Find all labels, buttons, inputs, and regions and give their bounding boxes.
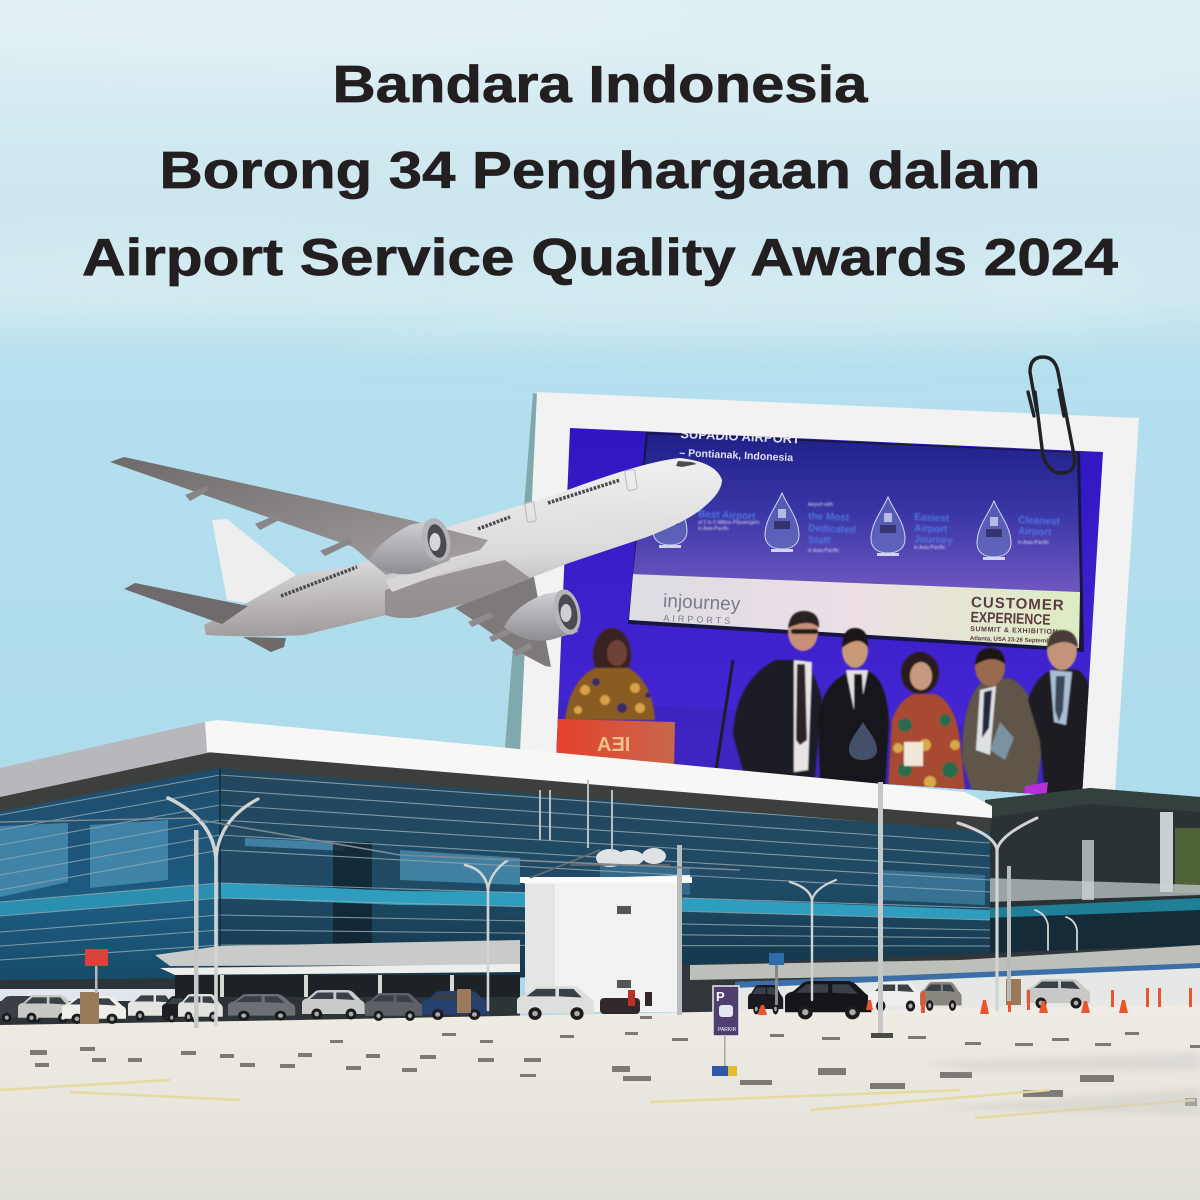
award captions on slide: in Asia-Pacific (698, 526, 730, 532)
cockpit window (676, 461, 697, 467)
belly fairing highlight (385, 555, 470, 592)
vertical fin (212, 519, 296, 603)
fuselage (204, 458, 722, 636)
white control tower building (520, 848, 692, 1012)
horizontal tailplane far (243, 637, 286, 652)
right wing teal band (985, 898, 1200, 918)
dark ground-floor backdrop (0, 975, 520, 1032)
teal band on glass (0, 883, 220, 916)
right wing lower glass (985, 897, 1200, 955)
yellow parking lines (0, 1080, 1195, 1118)
podium logo: AƎI (597, 734, 630, 756)
award trophies on slide (653, 489, 1011, 560)
satellite dishes (596, 848, 666, 867)
terminal left glass face (0, 760, 220, 992)
slide heading: SUPADIO AIRPORT (680, 426, 800, 446)
wing root shadow (385, 560, 530, 618)
paperclip (1028, 357, 1074, 473)
red no-entry sign (85, 949, 108, 993)
award captions on slide: of 2 to 5 Million Passengers (698, 520, 760, 526)
parked cars (0, 979, 1090, 1024)
roof white fascia (205, 720, 992, 818)
title: Borong 34 Penghargaan dalam (160, 142, 1040, 200)
blue hoarding left (0, 989, 175, 1001)
man 2 (818, 628, 889, 790)
customer experience logo: CUSTOMER (971, 594, 1065, 614)
photo frame shadow (505, 393, 540, 750)
dark stairwell column (333, 842, 372, 945)
man 4 (1028, 630, 1092, 800)
right canopy and white fence (690, 945, 1200, 1016)
injourney airports logo: AIRPORTS (663, 613, 733, 626)
asphalt shadows (920, 1052, 1200, 1115)
polaroid frame (520, 392, 1139, 792)
wheel stoppers (30, 1016, 1200, 1106)
award captions on slide: Airport with (808, 502, 833, 508)
mid cabin windows (478, 517, 510, 529)
horizontal tailplane near (124, 583, 248, 624)
far wing flap fairings (468, 612, 532, 656)
street lamps (168, 782, 1077, 1038)
award captions on slide: in Asia-Pacific (808, 548, 840, 554)
right ground-floor backdrop (680, 945, 1200, 1020)
projection screen (628, 432, 1084, 652)
screen slide (633, 434, 1080, 592)
near wing (110, 457, 488, 575)
award captions on slide: Cleanest (1018, 515, 1061, 528)
overhead cables (0, 818, 740, 870)
tail cabin windows (281, 567, 357, 596)
roof left slope (0, 722, 212, 797)
award captions on slide: Easiest (914, 512, 950, 525)
entrance canopy (155, 940, 520, 997)
award captions on slide: in Asia-Pacific (1018, 540, 1050, 546)
award captions on slide: the Most (808, 511, 850, 524)
customer experience logo: Atlanta, USA 23-26 September 2024 (970, 636, 1071, 645)
award ceremony photo (540, 420, 1110, 810)
award captions on slide: Dedicated (808, 523, 856, 536)
glass mullion lines (0, 775, 990, 960)
parking ground (0, 1005, 1200, 1200)
magenta floor accent (1024, 782, 1048, 794)
slide heading: – Pontianak, Indonesia (679, 447, 794, 464)
award captions on slide: Best Airport (698, 509, 756, 523)
title: Bandara Indonesia (332, 56, 869, 114)
award captions on slide: Airport (914, 523, 948, 535)
far engine (504, 587, 584, 641)
blue direction sign (769, 953, 784, 1005)
woman (888, 652, 966, 800)
podium (556, 719, 675, 764)
reflections on glass (0, 820, 985, 905)
customer experience logo: SUMMIT & EXHIBITION (970, 626, 1058, 636)
near engine (369, 516, 454, 574)
traffic cones (758, 988, 1192, 1015)
airplane (110, 457, 722, 667)
forward cabin windows (548, 480, 620, 503)
roof underside (0, 752, 992, 832)
award captions on slide: in Asia-Pacific (914, 545, 946, 551)
near wing flap fairings (185, 486, 352, 556)
rooftop mast (540, 780, 612, 850)
cabin doors (525, 469, 637, 522)
terminal right glass face (220, 760, 990, 992)
slide heading (680, 433, 797, 462)
brown signs (80, 979, 1021, 1024)
man 1 (733, 611, 822, 778)
microphone stand (716, 660, 733, 770)
title: Airport Service Quality Awards 2024 (82, 229, 1118, 287)
title (82, 56, 1118, 287)
parking sign: PARKIR (718, 1027, 737, 1033)
parking sign: P (716, 989, 725, 1004)
far wing (455, 572, 551, 667)
sponsor strip (629, 574, 1080, 648)
trophy held by man 2 (849, 722, 877, 760)
injourney airports logo: injourney (663, 591, 741, 615)
presenter at podium (565, 628, 655, 720)
stage floor glow (556, 700, 1090, 800)
award captions on slide: Staff (808, 535, 831, 547)
clouds (0, 0, 1200, 319)
far-right steel structure (985, 788, 1200, 915)
injourney airports logo (663, 593, 740, 624)
stage wall (540, 420, 1110, 810)
award captions on slide (698, 502, 1061, 554)
customer experience logo (970, 596, 1064, 644)
building corner line (219, 762, 221, 985)
award captions on slide: Airport (1018, 526, 1052, 538)
man 3 (962, 648, 1043, 800)
airport terminal (0, 720, 1200, 1032)
motorbikes and people (600, 990, 652, 1014)
customer experience logo: EXPERIENCE (970, 609, 1051, 629)
award captions on slide: Journey (914, 534, 954, 547)
parking sign (712, 986, 739, 1076)
